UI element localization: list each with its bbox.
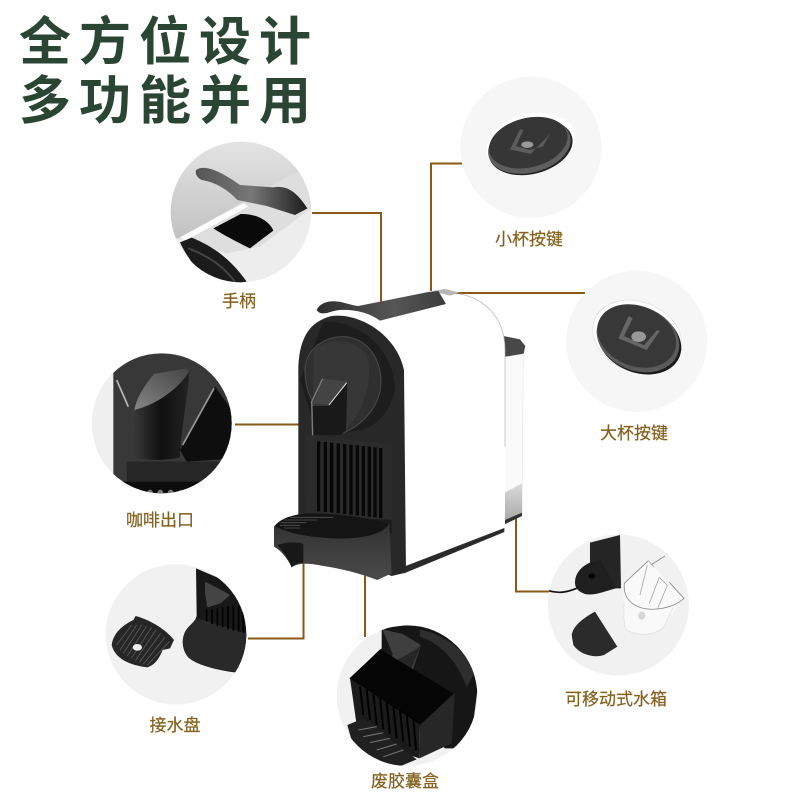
nozzle top face: [134, 368, 189, 410]
removable water tank: [623, 556, 684, 634]
black front panel: [298, 316, 406, 576]
base strip: [404, 528, 504, 573]
vent panel: [305, 434, 392, 520]
cup symbol: [618, 316, 660, 350]
title: 全方位设计: [19, 14, 319, 72]
connector: capsule box: [364, 502, 366, 637]
label: water tank: 可移动式水箱: [565, 690, 667, 709]
white side panel: [380, 293, 505, 567]
detail circle: drip tray: [106, 564, 250, 705]
label: large cup button: 大杯按键: [600, 424, 668, 443]
connector: small cup button: [431, 164, 462, 291]
label: small cup button: 小杯按键: [495, 230, 563, 249]
button face: [489, 116, 568, 168]
top button strip: [432, 289, 460, 296]
connector: water tank: [516, 427, 550, 592]
nozzle: [382, 630, 421, 669]
machine front: [183, 568, 250, 673]
connector: handle: [312, 213, 381, 306]
body strip: [178, 170, 313, 253]
button face: [597, 304, 676, 368]
handle: [317, 291, 446, 321]
button rim: [489, 124, 573, 176]
machine base: [548, 535, 621, 595]
coffee machine: [274, 289, 525, 580]
drip tray: [274, 513, 392, 580]
detail circle: small cup button: [460, 77, 602, 218]
label: coffee outlet: 咖啡出口: [126, 511, 194, 530]
coffee nozzle: [313, 379, 347, 405]
connector: large cup button: [447, 292, 585, 294]
top right edge: [460, 294, 505, 447]
label: capsule box: 废胶囊盒: [371, 772, 439, 791]
capsule box: [350, 649, 455, 758]
water tank: [503, 336, 525, 525]
grid plate: [112, 616, 174, 667]
detail circle: large cup button: [566, 271, 707, 412]
nozzle: [205, 582, 230, 607]
detail circle: water tank: [548, 534, 689, 676]
tray stripes: [347, 721, 417, 766]
button rim: [598, 324, 682, 374]
cup symbol: [510, 129, 550, 154]
front arc: [180, 238, 247, 287]
label: handle: 手柄: [222, 292, 256, 311]
capsule opening: [213, 214, 273, 248]
connector: coffee outlet: [235, 424, 322, 426]
title: [19, 14, 319, 131]
title: 多功能并用: [19, 73, 319, 131]
nozzle body: [140, 372, 190, 460]
label: drip tray: 接水盘: [150, 716, 200, 735]
handle grip: [196, 168, 307, 215]
vent slots: [122, 482, 200, 494]
detail circle: capsule box: [337, 623, 480, 773]
connector: drip tray: [248, 527, 304, 638]
brew head: [300, 322, 395, 437]
detail circle: coffee outlet: [92, 353, 232, 494]
tank lid: [572, 612, 617, 656]
detail circle: handle: [167, 140, 313, 287]
